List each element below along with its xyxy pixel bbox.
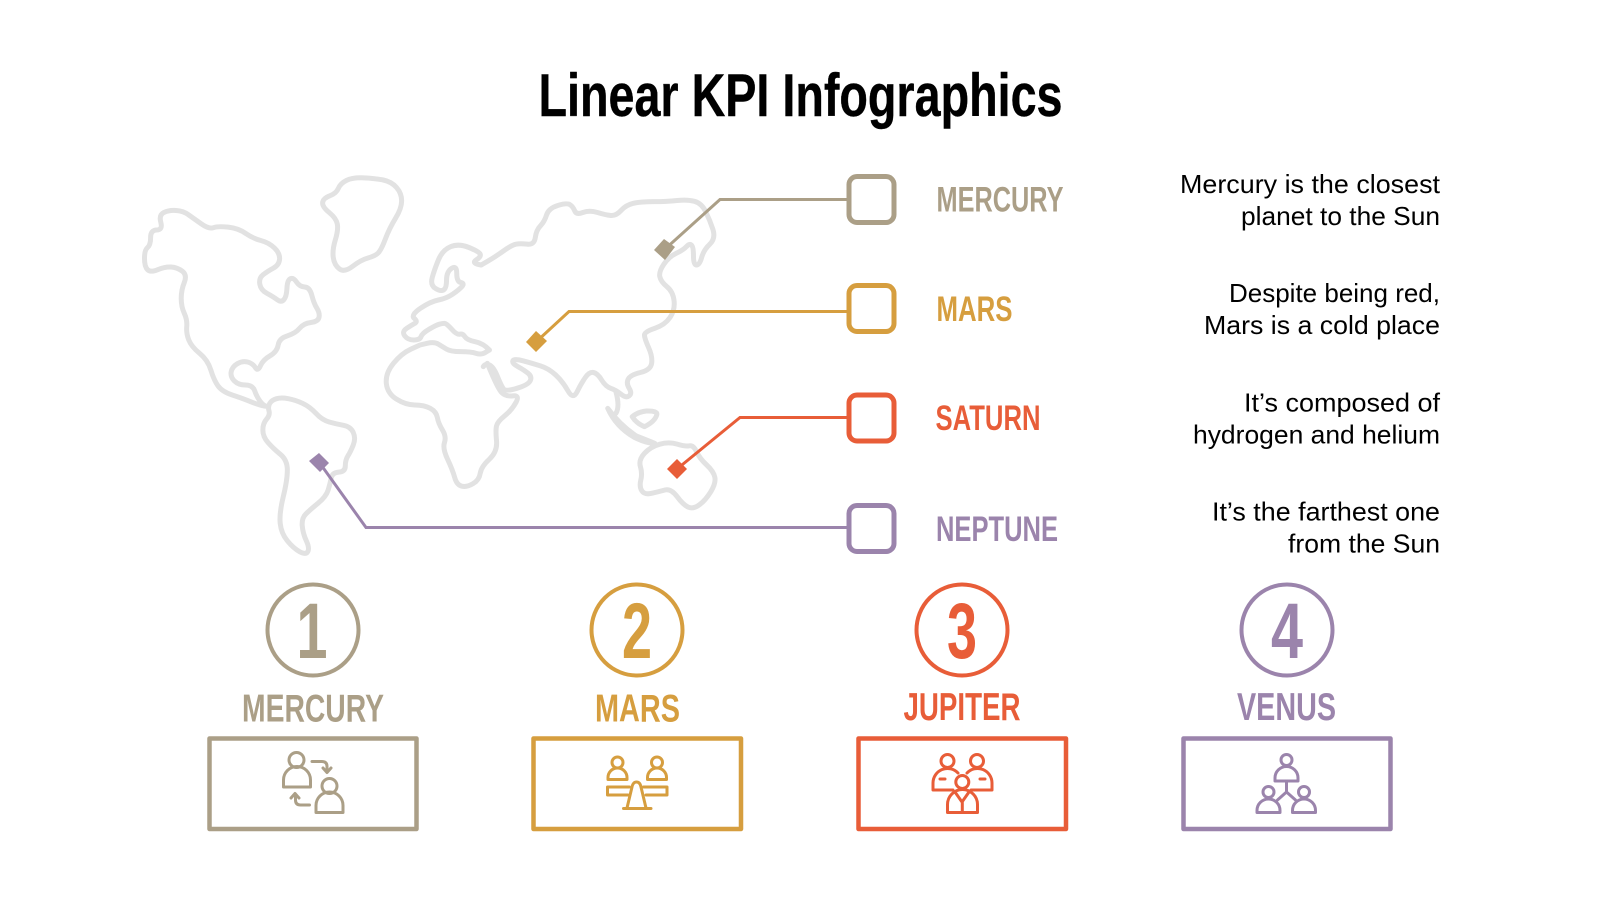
map: Africa (386, 343, 517, 486)
icon: balance seesaw (608, 757, 667, 808)
KPI column 1: Mercury (210, 584, 416, 829)
description: Saturn (1193, 388, 1441, 450)
heading: Venus: VENUS (1237, 686, 1336, 729)
number badge 1 (268, 584, 358, 676)
box outline (534, 738, 741, 829)
description: Mars: Mars is a cold place (1204, 310, 1440, 340)
icon: hierarchy (1257, 754, 1316, 812)
map: Greenland (323, 178, 402, 270)
description: Saturn: hydrogen and helium (1193, 420, 1440, 450)
description: Mercury: planet to the Sun (1241, 201, 1440, 231)
heading: Jupiter: JUPITER (904, 686, 1020, 729)
box outline (858, 738, 1066, 829)
icon: team group (933, 754, 992, 812)
map: Eurasia (481, 200, 714, 397)
connector: Neptune (309, 453, 894, 552)
description: Neptune (1212, 496, 1440, 558)
description: Mercury: Mercury is the closest (1180, 169, 1441, 199)
description: Mars: Despite being red, (1229, 278, 1440, 308)
connector: Saturn (667, 395, 894, 479)
KPI column 3: Jupiter (858, 584, 1066, 829)
label: Mars: MARS (936, 290, 1012, 329)
map: Southeast Asia islands (608, 392, 657, 443)
label: Saturn: SATURN (936, 399, 1040, 438)
heading: Mercury: MERCURY (242, 688, 384, 730)
world map outline (144, 178, 715, 553)
KPI column 4: Venus (1184, 584, 1390, 829)
map: Europe (404, 245, 489, 350)
box outline (210, 738, 416, 829)
label: Neptune: NEPTUNE (936, 510, 1058, 549)
connector: Mars (526, 286, 894, 352)
map: Australia (640, 443, 715, 508)
map: North America (144, 210, 319, 406)
number badge 3: 3 (947, 586, 977, 675)
connector: Mercury (654, 176, 894, 260)
description: Mars (1204, 278, 1440, 340)
number badge 4: 4 (1271, 586, 1303, 675)
heading: Mars: MARS (595, 688, 680, 730)
number badge 2 (592, 584, 682, 676)
number badge 2: 2 (622, 586, 652, 675)
number badge 3 (916, 584, 1008, 676)
description: Mercury (1180, 169, 1441, 231)
label: Mercury: MERCURY (936, 180, 1064, 220)
box outline (1184, 738, 1390, 829)
map: South America (263, 398, 355, 553)
number badge 1: 1 (296, 586, 328, 675)
title: Linear KPI Infographics (538, 62, 1062, 129)
description: Saturn: It’s composed of (1244, 388, 1441, 418)
number badge 4 (1242, 584, 1332, 676)
description: Neptune: from the Sun (1288, 528, 1440, 558)
description: Neptune: It’s the farthest one (1212, 496, 1440, 526)
icon: people exchange (284, 752, 343, 812)
KPI column 2: Mars (534, 584, 741, 829)
